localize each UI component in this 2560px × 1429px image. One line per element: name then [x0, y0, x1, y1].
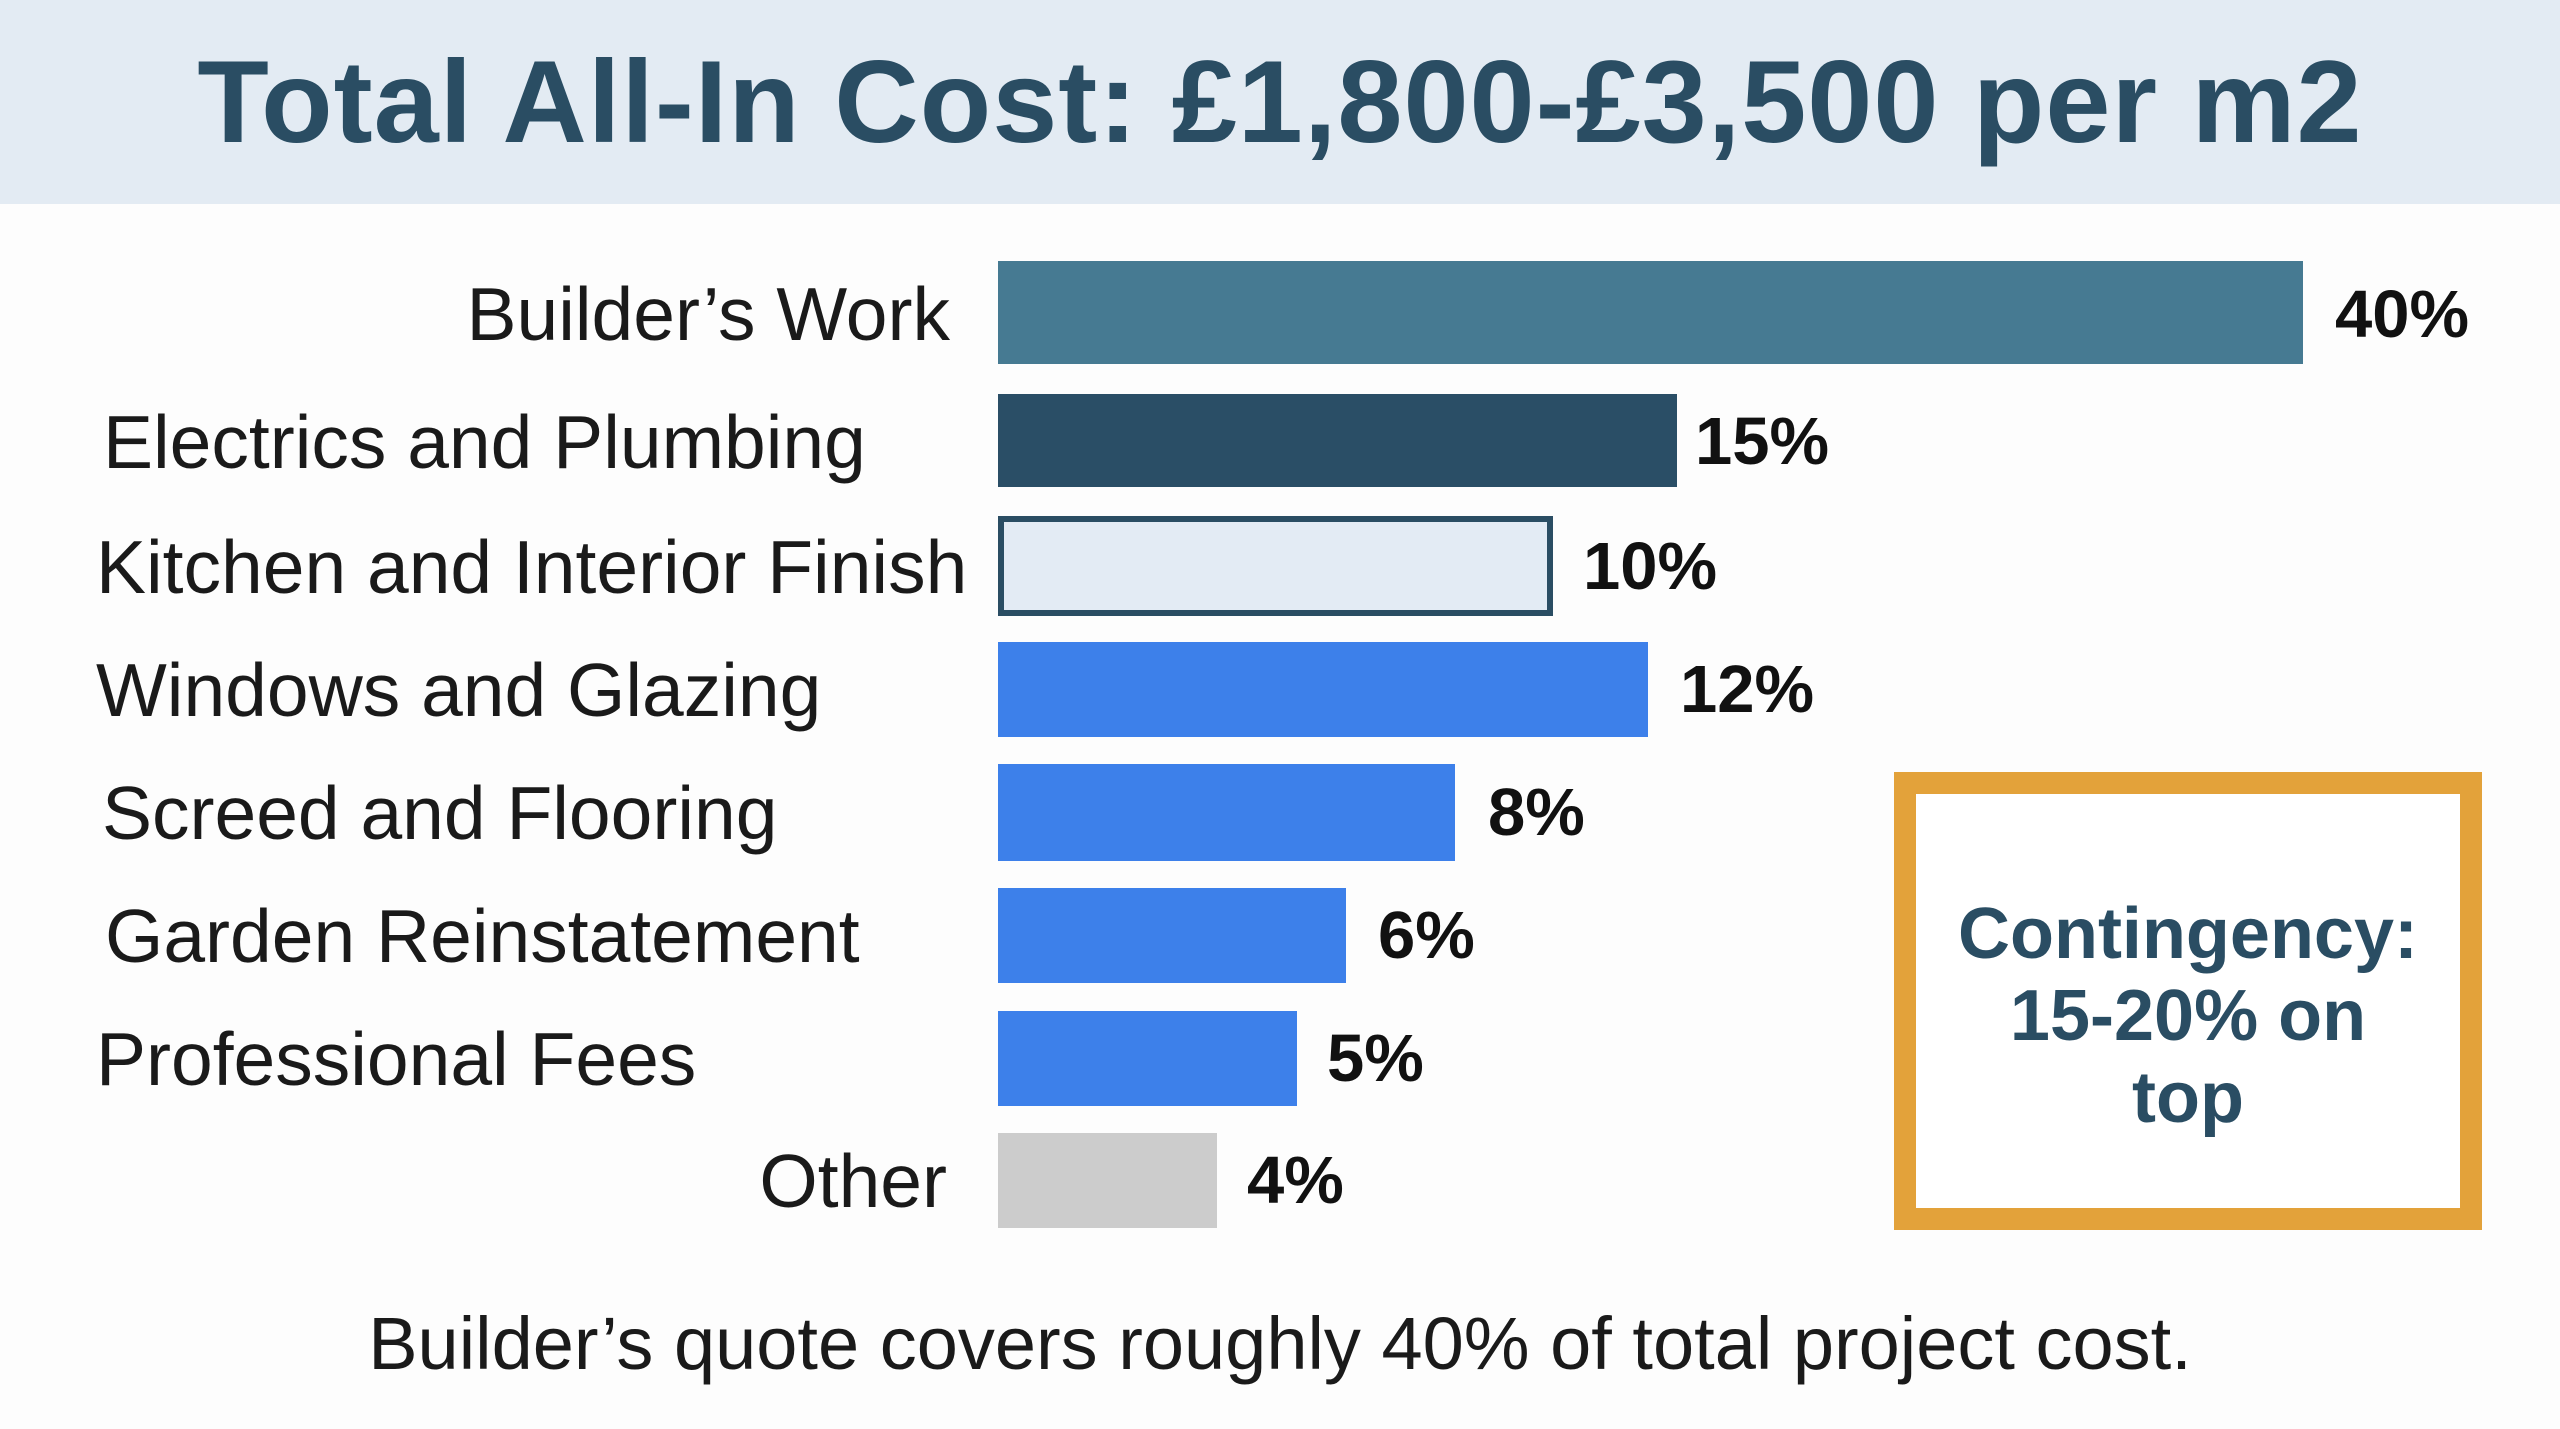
row: Garden Reinstatement — [105, 888, 1475, 983]
row: Professional Fees: 5% — [1327, 1021, 1424, 1096]
row: Other: 4% — [1247, 1143, 1344, 1218]
row: Professional Fees — [96, 1011, 1424, 1106]
row: Other — [759, 1133, 1344, 1228]
row: Garden Reinstatement: 6% — [1378, 898, 1475, 973]
row: Kitchen and Interior Finish: 10% — [1583, 529, 1717, 604]
row: Other: Other — [759, 1139, 947, 1223]
row: Electrics and Plumbing: 15% — [1695, 404, 1829, 479]
row: Kitchen and Interior Finish — [96, 516, 1717, 616]
row: Screed and Flooring: Screed and Flooring — [102, 771, 777, 855]
callout: contingency — [1894, 772, 2482, 1230]
row: Screed and Flooring: 8% — [1488, 775, 1585, 850]
row: Windows and Glazing: Windows and Glazing — [96, 648, 821, 732]
row: Garden Reinstatement: Garden Reinstatement — [105, 894, 860, 978]
bar chart — [96, 261, 2469, 1228]
header band — [0, 0, 2560, 204]
row: Windows and Glazing: 12% — [1680, 652, 1814, 727]
title: Total All-In Cost: £1,800-£3,500 per m2 — [197, 36, 2363, 167]
row: Electrics and Plumbing — [103, 394, 1829, 487]
callout: contingency: Contingency: — [1958, 894, 2418, 974]
row: Professional Fees: Professional Fees — [96, 1017, 696, 1101]
row: Electrics and Plumbing: Electrics and Plumbing — [103, 400, 866, 484]
row: Windows and Glazing — [96, 642, 1814, 737]
row: Kitchen and Interior Finish: Kitchen and Interior Finish — [96, 525, 967, 609]
footer note: Builder’s quote covers roughly 40% of total project cost. — [368, 1302, 2192, 1385]
callout: contingency: 15-20% on — [2010, 976, 2366, 1056]
row: Builder's Work: Builder’s Work — [466, 272, 950, 356]
row: Screed and Flooring — [102, 764, 1585, 861]
row: Builder's Work: 40% — [2335, 277, 2469, 352]
callout: contingency: top — [2132, 1058, 2244, 1138]
row: Builder's Work — [466, 261, 2469, 364]
